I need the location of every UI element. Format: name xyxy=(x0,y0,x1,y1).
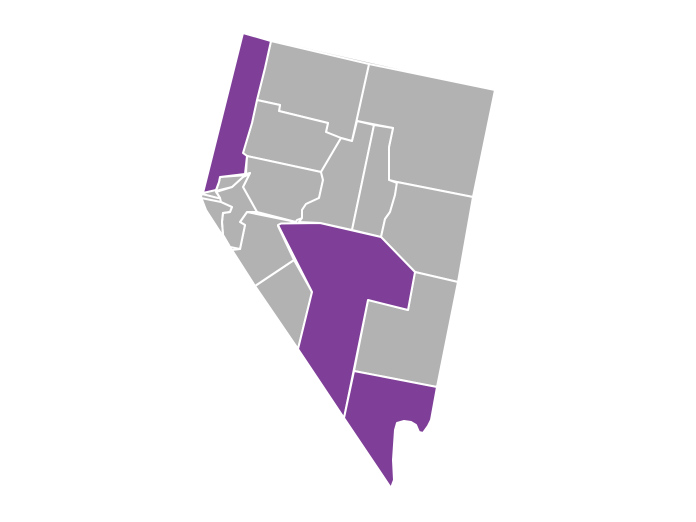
county: Lincoln xyxy=(354,272,458,387)
county: White Pine xyxy=(381,182,473,282)
county: Esmeralda xyxy=(255,260,312,349)
state base shape xyxy=(201,33,495,418)
county: Washoe xyxy=(203,33,271,193)
county: Elko xyxy=(352,64,495,197)
county: Lander xyxy=(299,121,374,230)
county: Churchill xyxy=(243,156,323,222)
county: Carson City boundary lines xyxy=(202,191,220,198)
county: Mineral xyxy=(232,212,296,286)
county: Humboldt xyxy=(257,41,369,141)
county: Lyon xyxy=(216,173,257,249)
county: Nye xyxy=(278,223,415,418)
county: Eureka xyxy=(352,125,397,237)
county: Pershing xyxy=(243,100,341,172)
county: Storey and Carson City xyxy=(216,175,248,191)
county: Douglas boundary lines xyxy=(201,198,232,247)
county: Clark xyxy=(344,371,437,488)
